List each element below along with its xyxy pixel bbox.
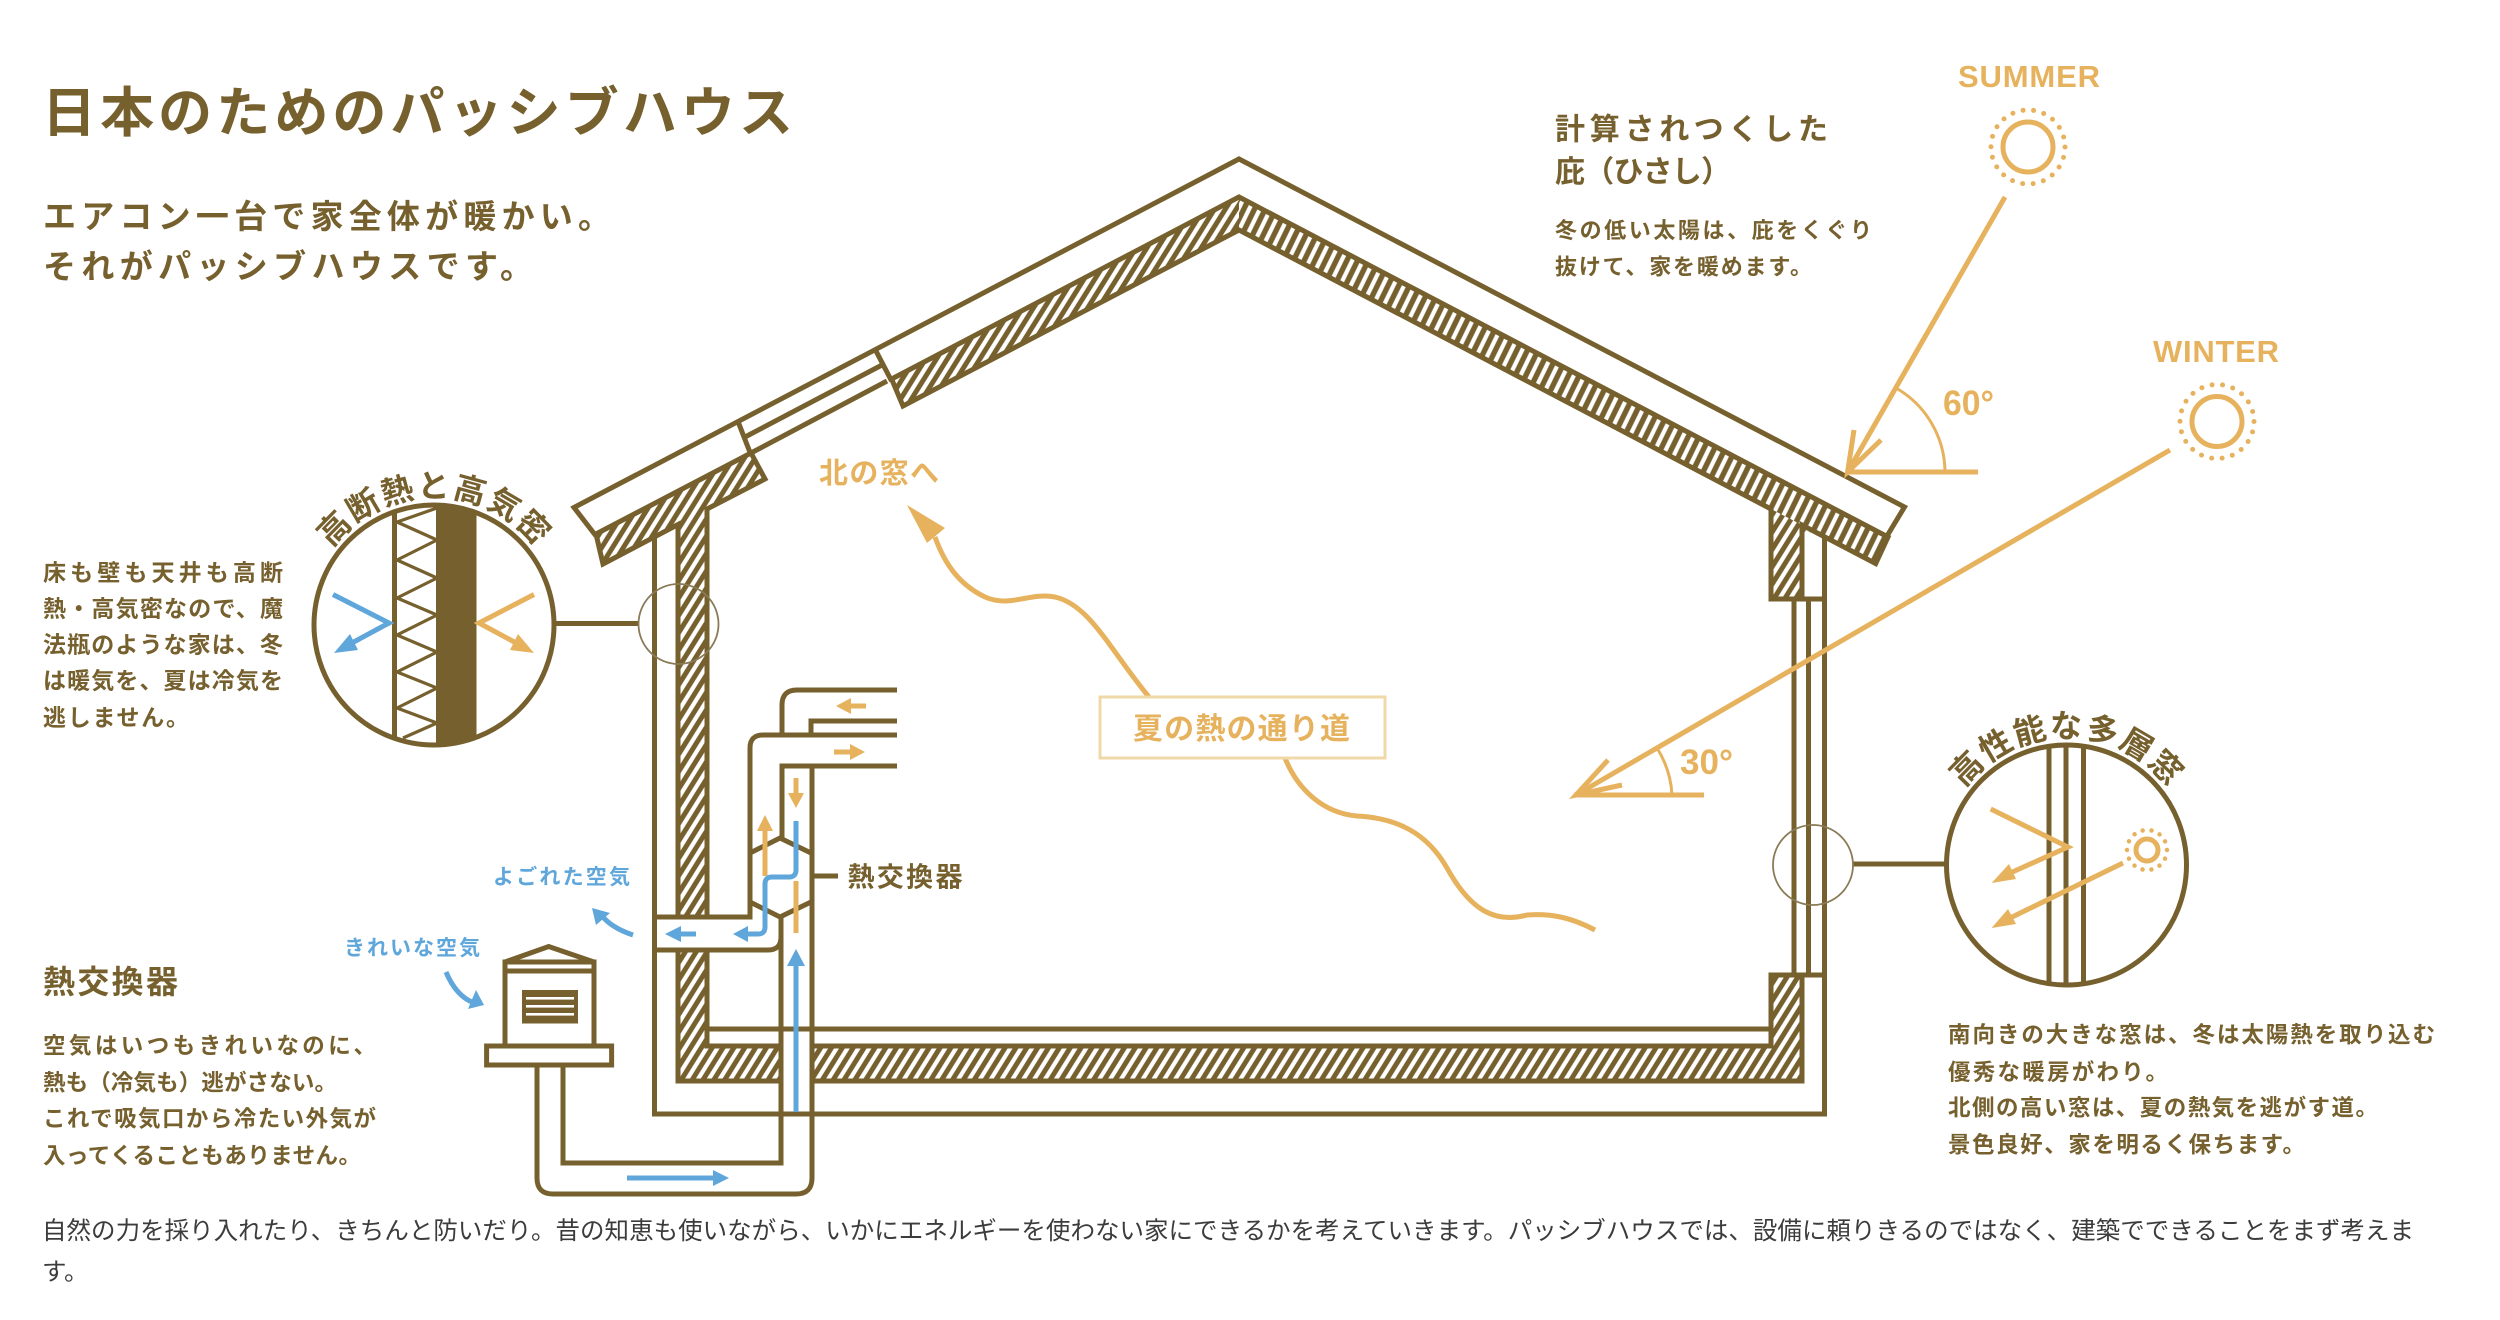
label: clean air: [344, 937, 484, 1009]
text block: windows: 北側の高い窓は、夏の熱気を逃がす道。: [1948, 1094, 2378, 1120]
house section drawing: [537, 159, 1904, 1194]
footer paragraph: す。: [42, 1259, 89, 1286]
summer heat path arrow: [907, 505, 1595, 930]
text block: heat exchanger: 入ってくることもありません。: [43, 1144, 361, 1168]
text block: heat exchanger: 熱交換器: [43, 964, 178, 1000]
connector: wall detail: [556, 584, 718, 664]
text block: heat exchanger: 空気はいつもきれいなのに、: [43, 1034, 376, 1058]
summer sun: [1958, 59, 2100, 184]
summer ray 60 degrees: [1846, 197, 2005, 472]
floor and wall hatching: [678, 950, 1802, 1084]
heat arrow blue: [333, 594, 389, 653]
text block: insulation: は暖気を、夏は冷気を: [43, 668, 283, 694]
text block: heat exchanger: [43, 964, 376, 1168]
text block: insulation: 床も壁も天井も高断: [43, 560, 283, 586]
text block: windows: 景色良好、家を明るく保ちます。: [1948, 1132, 2305, 1158]
title: 日本のためのパッシブハウス: [42, 84, 793, 144]
glass panes: [2049, 740, 2084, 990]
duct airflow arrows: exhaust: [757, 698, 866, 933]
label: dirty air: [493, 865, 633, 935]
panel: insulation detail circle: [314, 500, 554, 750]
text block: overhang: 冬の低い太陽は、庇をくぐり: [1555, 218, 1872, 243]
heat exchanger hexagon: [750, 838, 838, 917]
winter ray 30 degrees: [1574, 450, 2170, 795]
text block: overhang: 抜けて、家を暖めます。: [1555, 254, 1812, 280]
text block: windows: 南向きの大きな窓は、冬は太陽熱を取り込む: [1948, 1022, 2435, 1048]
panel: window detail circle: [1946, 740, 2186, 990]
text block: insulation: [43, 560, 283, 730]
reflected ray: [1991, 809, 2068, 883]
winter sun: WINTER: [2153, 334, 2279, 369]
footer paragraph: 自然の力を採り入れたり、きちんと防いだり。昔の知恵も使いながら、いかにエネルギーを使わない家にできるかを考えていきます。パッシブハウスでは、設備に頼りきるのではなく、建築でできることをまず考えま: [42, 1217, 2414, 1245]
summer sun: SUMMER: [1958, 59, 2100, 94]
label: overhang heading: 計算されつくした: [1555, 114, 1828, 146]
small sun: [2127, 830, 2167, 870]
text block: heat exchanger: 熱も（冷気も）逃がさない。: [43, 1070, 337, 1096]
entering ray: [1992, 863, 2123, 928]
roof insulation hatching: [596, 197, 1888, 917]
roof outline: [574, 159, 1904, 536]
north skylight: [739, 351, 892, 455]
text block: heat exchanger: これで吸気口から冷たい外気が: [43, 1106, 376, 1132]
ventilation ducts: [537, 690, 897, 1194]
heat arrow orange: [479, 594, 534, 653]
duct airflow arrows: fresh air: [627, 821, 805, 1186]
label: clean air: きれいな空気: [344, 937, 480, 960]
wall layers: [392, 500, 476, 750]
text block: windows: [1948, 1022, 2435, 1158]
label: overhang heading: [1555, 114, 1828, 189]
outer walls and floor lines: [652, 536, 1827, 1116]
text block: insulation: 法瓶のような家は、冬: [43, 632, 283, 658]
heading: insulation arc: 高断熱と高気密: [314, 472, 553, 548]
label: heat exchanger: 熱交換器: [848, 862, 962, 892]
subtitle: エアコン一台で家全体が暖かい。: [43, 198, 611, 235]
label: dirty air: よごれた空気: [493, 865, 630, 889]
summer ray 60 degrees: 60°: [1943, 384, 1994, 423]
text block: overhang: [1555, 218, 1872, 280]
air intake unit: [487, 946, 612, 1065]
label: to north window: 北の窓へ: [819, 457, 939, 490]
subtitle: それがパッシブハウスです。: [43, 248, 533, 285]
text block: insulation: 逃しません。: [43, 704, 189, 730]
subtitle: [43, 198, 611, 285]
footer paragraph: [42, 1217, 2414, 1286]
winter sun: [2153, 334, 2279, 458]
text block: windows: 優秀な暖房がわり。: [1948, 1059, 2168, 1085]
heading: window arc: 高性能な多層窓: [1947, 710, 2186, 788]
label: overhang heading: 庇（ひさし）: [1555, 156, 1731, 189]
label: summer heat path: 夏の熱の通り道: [1133, 713, 1350, 746]
text block: insulation: 熱・高気密なので、魔: [43, 596, 283, 622]
winter ray 30 degrees: 30°: [1680, 743, 1733, 782]
label: summer heat path: [1100, 697, 1385, 758]
connector: window detail: [1773, 825, 1947, 905]
